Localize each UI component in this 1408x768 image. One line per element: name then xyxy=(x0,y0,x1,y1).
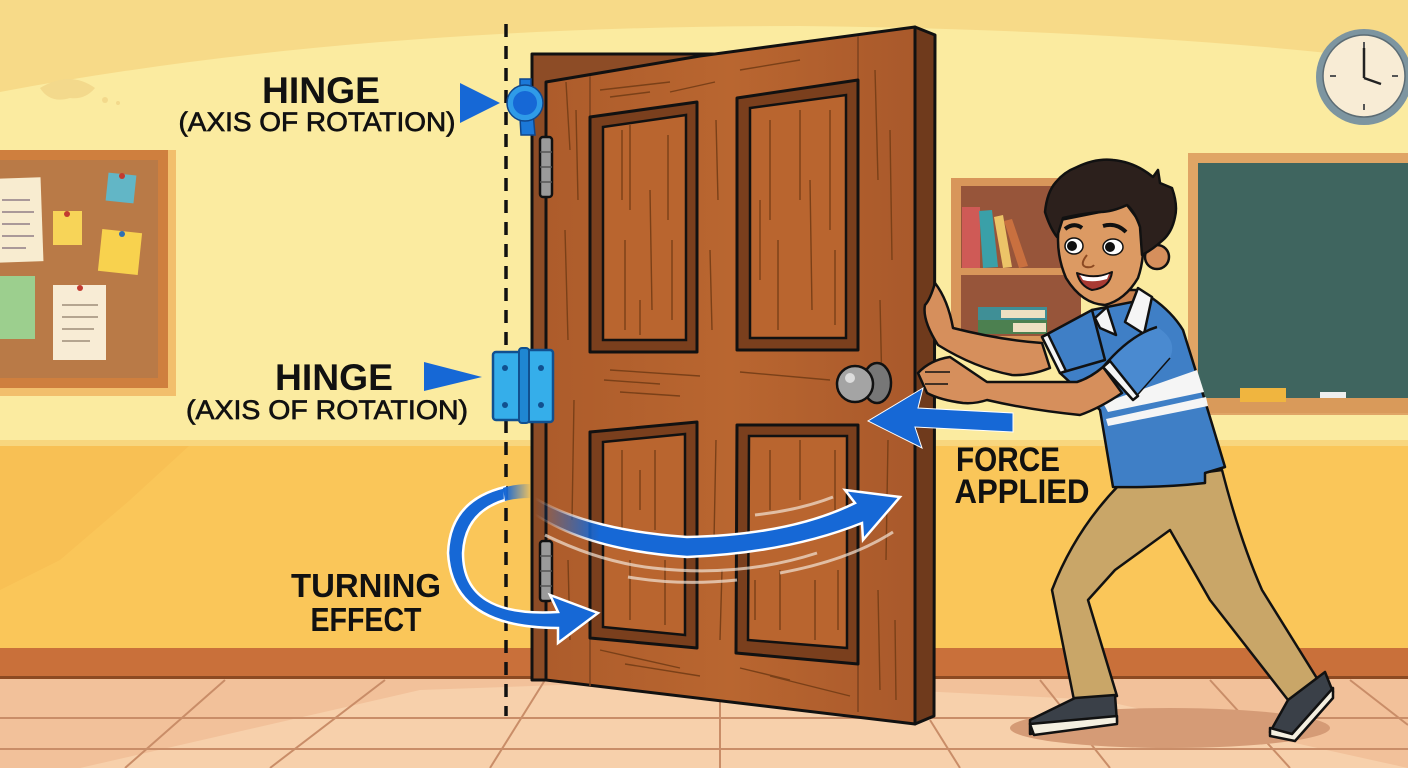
arrow: force applied xyxy=(868,388,1013,448)
arrow: top hinge pointer xyxy=(460,83,500,123)
arrow: door swing xyxy=(533,490,900,582)
door panel: top left xyxy=(590,102,697,352)
shirt stripes xyxy=(1103,370,1204,412)
label: force applied: APPLIED xyxy=(954,473,1090,511)
face xyxy=(1058,205,1143,305)
door knob xyxy=(837,363,891,403)
label: turning effect xyxy=(291,567,441,638)
shirt xyxy=(1060,298,1225,487)
label: top hinge: HINGE xyxy=(262,70,380,111)
door slab xyxy=(546,27,915,724)
back sleeve xyxy=(1042,310,1105,373)
wood grain xyxy=(590,36,858,712)
bulletin board xyxy=(0,150,176,396)
label: middle hinge: HINGE xyxy=(275,357,393,398)
icon: blue top hinge xyxy=(507,79,543,135)
label: middle hinge: (AXIS OF ROTATION) xyxy=(186,395,468,425)
arrow: turning effect xyxy=(448,484,598,643)
front arm xyxy=(918,357,1122,415)
door panel: bottom right xyxy=(736,425,858,664)
boy pushing door xyxy=(918,160,1333,748)
bookshelf xyxy=(951,178,1081,343)
eyebrows xyxy=(1065,225,1126,232)
ear xyxy=(1145,245,1169,269)
hair xyxy=(1045,160,1176,255)
label: top hinge: (AXIS OF ROTATION) xyxy=(178,107,456,137)
label: turning effect: TURNING xyxy=(291,567,441,604)
chalkboard xyxy=(1188,153,1408,415)
floor shadow xyxy=(1010,708,1330,748)
label: middle hinge xyxy=(186,357,468,425)
icon: blue middle hinge xyxy=(493,348,553,423)
label: turning effect: EFFECT xyxy=(310,601,422,638)
door panel: bottom left xyxy=(590,422,697,648)
collar xyxy=(1095,288,1152,335)
neck xyxy=(1105,290,1140,330)
grey hinges xyxy=(540,137,552,601)
label: top hinge xyxy=(178,70,456,137)
trousers xyxy=(1052,470,1318,700)
nose xyxy=(1083,255,1094,267)
door xyxy=(532,27,935,724)
door edge xyxy=(915,27,935,724)
shoes xyxy=(1030,695,1117,734)
door frame xyxy=(532,54,720,680)
arrow: middle hinge pointer xyxy=(424,362,482,391)
label: force applied: FORCE xyxy=(956,441,1060,479)
eyes xyxy=(1065,238,1083,254)
wall clock xyxy=(1316,29,1408,125)
mouth xyxy=(1077,272,1112,290)
back arm xyxy=(925,283,1050,375)
label: force applied xyxy=(954,441,1090,511)
front sleeve xyxy=(1103,327,1172,400)
door panel: top right xyxy=(737,80,858,350)
axis of rotation dashed line xyxy=(504,24,508,716)
